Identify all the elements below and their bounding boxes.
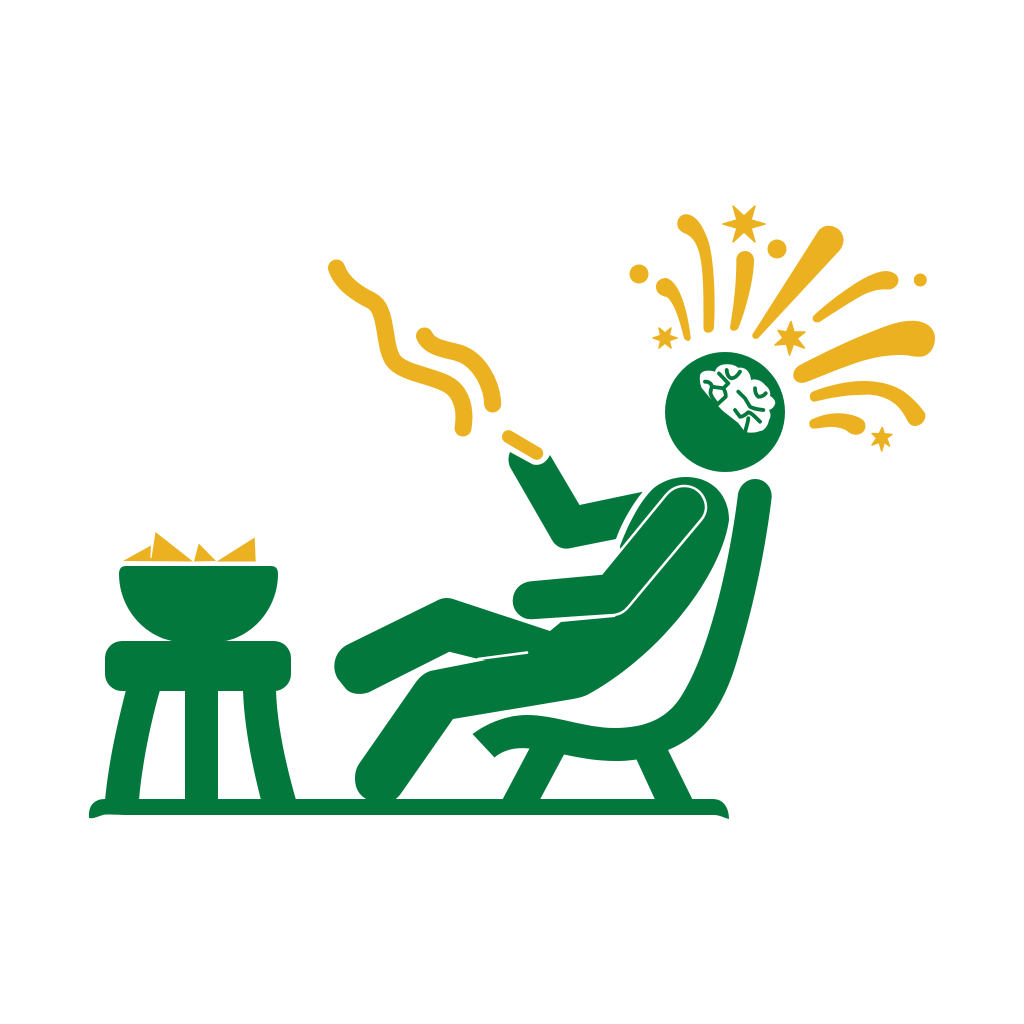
- chair: [472, 479, 772, 800]
- figure: [334, 352, 785, 800]
- spark strokes: [656, 214, 935, 435]
- stool: [105, 641, 296, 800]
- bowl: [119, 566, 278, 642]
- head: [665, 352, 785, 472]
- cigarette: [510, 438, 537, 454]
- chips: [123, 532, 256, 562]
- back arm: [508, 452, 643, 549]
- floor: [89, 799, 729, 819]
- spark stars: [653, 206, 892, 451]
- sparks: [630, 206, 935, 451]
- spark dots: [630, 240, 927, 286]
- smoke: [336, 268, 493, 428]
- brain: [700, 364, 775, 433]
- raised leg: [334, 598, 600, 694]
- leg gap: [478, 653, 527, 659]
- front arm: [511, 486, 706, 621]
- torso and lower leg: [355, 477, 729, 800]
